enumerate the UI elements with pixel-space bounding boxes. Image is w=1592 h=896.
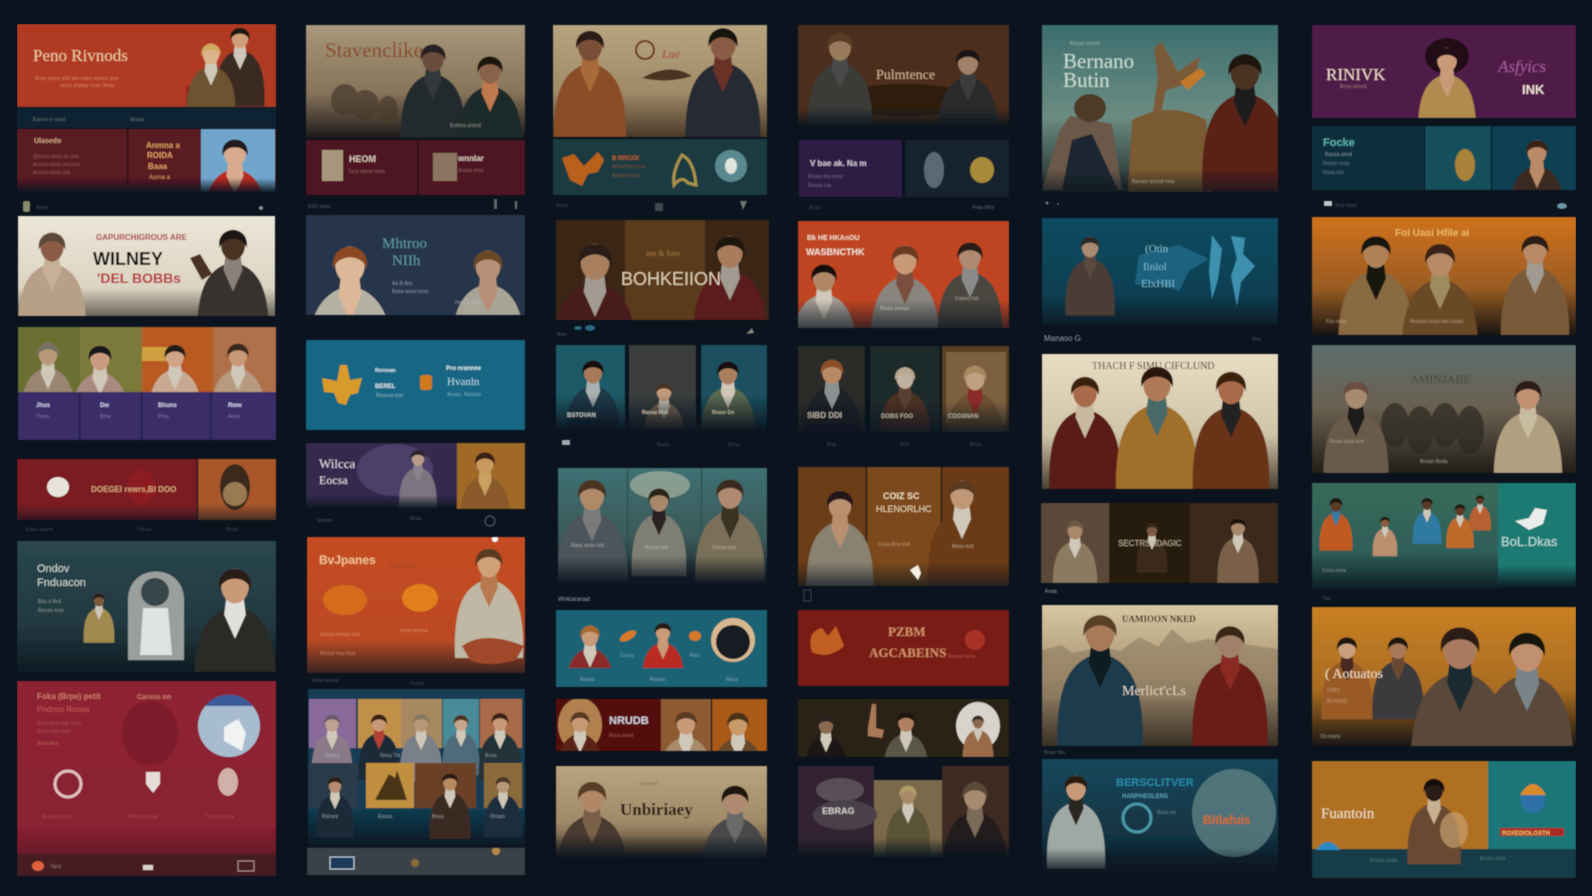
panel: orange four man poster: ( Aotuatos	[1325, 667, 1383, 682]
panel: orange trio poster: Bk HE HKAnOU	[807, 235, 860, 242]
panel: four portraits with purple captions: Anna	[228, 414, 240, 420]
panel: dark teal icon row: B RRCIOI	[612, 156, 639, 162]
panel: maroon info row: Anmna a	[146, 141, 180, 150]
panel: crimson poster with circles: Tnasa annsa	[205, 814, 234, 820]
panel: maroon and orange portraits: Rnsa annd	[609, 733, 633, 739]
panel: maroon info row: Qmand ahan an dnd	[33, 154, 79, 160]
panel: orange poster with woman: BvJpanes	[319, 553, 376, 567]
panel: three dark portrait cards: DOBS FOO	[881, 414, 913, 420]
panel: dark teal Bitlafuis poster	[1042, 759, 1278, 874]
panel: orange four man poster: Cb rnans	[1320, 734, 1341, 740]
panel: three dark portrait cards	[798, 346, 1010, 432]
panel: dark teal Ondov poster: Ondov	[37, 563, 70, 575]
caption row: column four: Bna	[827, 442, 836, 448]
panel: sepia Stavencliko poster: Stavenclike	[325, 38, 423, 62]
panel: maroon two-column row: HEOM	[349, 154, 376, 164]
footer: column six row one: Rnd nnsa	[1335, 203, 1357, 209]
panel: crimson poster with circles: Rnasa annsa	[128, 814, 158, 820]
footer: column two purple	[317, 515, 496, 527]
panel: navy strip	[17, 108, 276, 129]
footer: column three row two	[557, 324, 754, 338]
caption row: column four: Bnsa	[970, 442, 982, 448]
panel: maroon info row	[17, 128, 276, 192]
panel: grey crowd poster: Rnan nnsa hnd	[1330, 439, 1364, 445]
panel: deep teal Otin poster: Ilnlol	[1143, 261, 1167, 273]
panel: teal trio poster: Rans anan rnd	[571, 543, 604, 549]
panel: orange trio poster: Fsa nnsa	[1326, 319, 1347, 325]
panel: crimson poster with circles: Anasa annsa	[42, 814, 71, 820]
panel: orange and teal Fuantoin poster: Bnans rnsa	[1480, 856, 1506, 862]
panel: portrait grid on teal: Onsan	[490, 814, 505, 820]
panel: portrait grid on teal: Bnsa	[432, 814, 444, 820]
panel: sage Bernano poster: Rananr ansnd rnsa	[1132, 179, 1175, 185]
panel: teal circles banner	[556, 610, 768, 688]
panel: dark teal Focke row: Nsna rna	[1323, 170, 1344, 176]
panel: portrait grid on teal	[308, 688, 526, 848]
panel: deep teal Otin poster: (Otin	[1145, 243, 1169, 255]
panel: tan Unbiriaey poster: Po Ehnd	[640, 782, 658, 787]
panel: deep teal Otin poster	[1042, 218, 1278, 325]
panel: navy portrait poster: Bana ansa nnsa	[392, 289, 428, 295]
panel: maroon banner with oval portrait	[17, 458, 277, 520]
panel: dark teal Ondov poster	[17, 540, 276, 672]
footer: column five row two	[1044, 334, 1261, 343]
panel: plum Rinivk banner: Bnsa annsd	[1340, 84, 1367, 90]
panel: brown Coiz Hlenorlhc poster: HLENORLHC	[876, 504, 932, 514]
panel: four portraits with purple captions: Rww	[228, 403, 242, 409]
panel: purple Wilcca poster	[306, 442, 526, 510]
panel: cream Wilney poster: 'DEL BOBBs	[97, 270, 181, 286]
footer: row one: Rnad	[36, 205, 48, 211]
panel: dark teal Focke row	[1312, 126, 1576, 230]
panel: orange and teal Fuantoin poster	[1312, 761, 1576, 878]
panel: orange four man poster: Knnoo	[1327, 698, 1347, 705]
panel: teal trio poster: Bnnsa rna	[645, 545, 668, 551]
footer: column two orange: Ranan	[410, 681, 425, 687]
panel: brown Bohkeiion poster	[556, 220, 770, 320]
panel: navy strip: dnaaa	[130, 117, 144, 123]
panel: sepia Stavencliko poster	[305, 24, 526, 138]
panel: teal circles banner: Ransa	[580, 677, 595, 683]
panel: crimson poster with circles	[17, 680, 277, 876]
caption row: column three: Bnsa	[728, 442, 740, 448]
panel: orange and teal Fuantoin poster: Fuantoin	[1321, 806, 1375, 822]
panel: tan Unbiriaey poster	[555, 765, 768, 857]
panel: orange trio poster	[1312, 217, 1576, 366]
panel: navy portrait poster: Mhtroo	[382, 236, 427, 252]
panel: plum Rinivk banner: INK	[1522, 82, 1545, 97]
icon: golden cross	[322, 365, 362, 405]
panel: red Peno Rivnods banner: ranrg ahdaar rnarc Nnas	[60, 83, 115, 89]
footer: column four row one	[809, 204, 995, 211]
panel: four portraits with purple captions: Prna	[158, 414, 169, 420]
panel: green figures with teal side: Cnsa nnsa	[1322, 568, 1346, 574]
panel: purple and dark icon row: V bae ak. Na m	[810, 159, 866, 168]
panel: teal circles banner: Rnana	[650, 677, 665, 683]
panel: maroon and orange portraits: NRUDB	[609, 715, 649, 727]
panel: four portraits with purple captions: Brna	[100, 414, 111, 420]
caption row: column three	[561, 439, 740, 448]
panel: three teal portrait cards	[556, 344, 768, 429]
panel: blue info banner: Rnrnnan	[375, 368, 396, 374]
panel: dark purple trio poster: EBRAG	[822, 806, 855, 816]
panel: brown Coiz Hlenorlhc poster	[798, 466, 1010, 586]
footer: column five row one	[1046, 202, 1059, 205]
panel: deep red Przm poster: Rnsan hnna	[948, 654, 975, 660]
panel: dark teal Bitlafuis poster: BERSCLITVER	[1116, 777, 1194, 789]
footer: column two orange	[312, 678, 425, 687]
panel: orange poster with woman: Rnana ansn	[390, 564, 417, 570]
panel: cream Wilney poster	[17, 215, 276, 317]
panel: plum Rinivk banner: Asfyics	[1497, 57, 1547, 76]
panel: grey footer with badge	[306, 847, 526, 876]
footer: column four row one: Pnas BNs	[972, 205, 995, 211]
panel: orange trio poster: Rnanr pnnsa	[880, 306, 909, 312]
panel: crimson poster with circles: Rnar nnsa ann	[37, 729, 70, 735]
panel: maroon two-column row: Anasa rnsa	[458, 168, 484, 174]
caption row: column four	[827, 442, 982, 448]
panel: portrait grid on teal: Rananr	[322, 814, 339, 820]
panel: three teal portrait cards: Rnasr Dn	[712, 410, 734, 416]
panel: green figures with teal side: BoL.Dkas	[1501, 534, 1558, 549]
panel: purple and dark icon row: Rnasa rna	[808, 183, 831, 189]
panel: crimson poster with circles: Carxns on	[137, 694, 171, 701]
panel: three dark portrait cards: CDGSNAN	[948, 414, 978, 420]
panel: maroon info row: Aurna a	[149, 175, 171, 181]
panel: dark teal Bitlafuis poster: HANPHEGLENS	[1122, 794, 1168, 800]
panel: blue info banner: Pro nrannee	[446, 366, 482, 372]
panel: teal trio poster	[558, 468, 768, 582]
panel: blue info banner: Hvanln	[447, 376, 480, 388]
panel: cream trio poster: THACH F SIMU CIFCLUND	[1092, 361, 1215, 372]
panel: maroon and orange portraits	[556, 698, 768, 752]
panel: grey crowd poster: AMINJABE	[1410, 372, 1471, 386]
panel: cream Wilney poster: WILNEY	[93, 249, 163, 269]
caption row: column four: Rnd	[900, 442, 909, 448]
panel: blue info banner	[306, 340, 526, 430]
panel: dark teal Ondov poster: Fnduacon	[37, 577, 86, 589]
panel: dark brown cast row	[1041, 503, 1278, 592]
panel: crimson poster with circles: Tana	[50, 864, 61, 870]
panel: red Peno Rivnods banner: Ansa aham ahd ahv mare onsarc ann	[35, 76, 119, 82]
panel: teal trio poster: Onnsa rna	[712, 545, 736, 551]
panel: tan two figure poster: Lae	[661, 47, 681, 61]
panel: three dark portrait cards: SIBD DDI	[807, 411, 842, 420]
panel: blue info banner: BEREL	[375, 384, 396, 390]
panel: red Peno Rivnods banner	[17, 24, 277, 108]
caption row: column three: Bana	[657, 442, 669, 448]
footer: row four: Eana ansnd	[26, 527, 53, 533]
footer: column three row one: Rnsa	[556, 203, 568, 209]
panel: four portraits with purple captions: Dw	[100, 403, 109, 409]
footer: column three teal: Wnkiaranad	[558, 597, 590, 603]
panel: purple Wilcca poster: Wilcca	[319, 456, 356, 471]
panel: maroon info row: Ansnd mana rnd	[33, 170, 70, 176]
panel: blue info banner: Rnansa nna	[376, 393, 403, 399]
footer: column five row two: Rns	[1252, 337, 1261, 343]
panel: navy portrait poster: Aa B Ans	[392, 281, 413, 287]
panel: crimson poster with circles: Foka (Brpe) petit	[37, 692, 101, 701]
panel: maroon info row: Baaa	[148, 162, 168, 171]
panel: three teal portrait cards: Ransa Rnd	[642, 410, 668, 416]
panel: teal circles banner: Nnsa	[726, 677, 738, 683]
panel: sage Bernano poster	[1042, 25, 1288, 192]
panel: teal circles banner: Rna	[690, 653, 699, 659]
panel: dark teal icon row: Ranaa nnsa	[612, 173, 639, 179]
footer: row one	[22, 200, 264, 213]
panel: tan Unmoonnked poster	[1042, 605, 1278, 752]
footer: column five row four: Rnda	[1045, 589, 1057, 595]
panel: brown Pulmtence poster	[798, 24, 1010, 125]
panel: navy portrait poster: Hansa asna	[455, 300, 482, 306]
panel: sage Bernano poster: Bernano	[1063, 49, 1134, 73]
footer: column four brown	[804, 590, 811, 601]
panel: tan Unmoonnked poster: UAMIOON NKED	[1122, 614, 1196, 624]
panel: portrait grid on teal: Eansa	[378, 814, 392, 820]
panel: orange trio poster	[797, 220, 1010, 328]
panel: dark teal icon row: Ansa hna nnsa	[612, 164, 646, 170]
footer: column five tan: Bnsa Yos	[1044, 750, 1065, 756]
panel: navy strip: Eanoa vr uand	[33, 117, 66, 123]
footer: row four: Dnsaa	[137, 527, 152, 533]
panel: maroon two-column row: wnnlar	[457, 154, 484, 163]
panel: cream trio poster	[1042, 354, 1278, 498]
footer: column six row one	[1324, 201, 1567, 209]
panel: sepia Stavencliko poster: Eomna ansnd	[450, 123, 481, 129]
panel: tan Unbiriaey poster: Unbiriaey	[620, 800, 693, 819]
panel: purple and dark icon row: Bnsan rna nnsa	[808, 174, 843, 180]
panel: brown Coiz Hlenorlhc poster: Cnsa Rna hnd	[878, 542, 910, 548]
footer: column three row two: Bna	[557, 332, 566, 338]
panel: deep red Przm poster: PZBM	[888, 624, 926, 639]
panel: navy portrait poster	[306, 214, 526, 316]
panel: dark teal icon row	[552, 138, 768, 196]
panel: orange trio poster: Canns rnd	[955, 296, 978, 302]
panel: orange and teal Fuantoin poster: ROXEDIOLOSTH	[1502, 831, 1550, 837]
panel: dark teal Bitlafuis poster: Rnsa nn	[1157, 810, 1176, 816]
panel: dark teal Focke row: Focke	[1323, 137, 1355, 149]
panel: sage Bernano poster: Butin	[1063, 68, 1110, 92]
panel: purple Wilcca poster: Eocsa	[319, 473, 348, 487]
panel: deep red Przm poster: AGCABEINS	[869, 645, 946, 660]
panel: orange four man poster	[1312, 607, 1576, 786]
panel: four portraits with purple captions: Jhus	[36, 403, 51, 409]
footer: row four: Rnsa	[226, 527, 238, 533]
panel: red Peno Rivnods banner: Peno Rivnods	[33, 46, 128, 65]
panel: tan two figure poster	[552, 24, 768, 138]
panel: orange trio poster: WASBNCTHK	[806, 247, 865, 257]
panel: orange and teal Fuantoin poster: Rnsan hnda	[1370, 858, 1397, 864]
panel: four portraits with purple captions	[18, 326, 277, 440]
panel: plum Rinivk banner: RINIVK	[1326, 65, 1386, 84]
footer: column two purple: Snstnn	[317, 518, 333, 524]
panel: orange poster with woman: Ansnd manar nnd	[320, 632, 360, 638]
panel: orange poster with woman: Rnsnd hna rnsa	[320, 651, 356, 657]
panel: four portraits with purple captions: Thrna	[36, 414, 49, 420]
panel: orange poster with woman: Ansa manna	[400, 628, 428, 634]
panel: purple and dark icon row	[798, 140, 1009, 198]
footer: column six green: Tns	[1322, 596, 1331, 602]
panel: portrait grid on teal: Rnana	[325, 753, 340, 759]
panel: deep teal Otin poster: ElxHBI	[1141, 278, 1176, 290]
panel: maroon info row: Ulasedo	[34, 138, 61, 145]
panel: dark teal Ondov poster: Ranaa nnsr	[38, 608, 64, 614]
panel: navy portrait poster: NIIh	[392, 253, 421, 269]
panel: dark purple trio poster	[798, 766, 1009, 886]
panel: crimson poster with circles: Bhon Ans	[37, 741, 59, 747]
panel: green figures with teal side	[1312, 483, 1576, 589]
panel: dark teal Focke row: Rnsan nnsa	[1323, 161, 1350, 167]
footer: column four row one: Bnsa	[809, 205, 821, 211]
panel: portrait grid on teal: Nnsa Thr	[380, 753, 401, 759]
panel: maroon info row: ROIDA	[147, 151, 173, 160]
panel: sage Bernano poster: Rnsan ansnd	[1070, 41, 1100, 47]
panel: crimson poster with circles: Pndnsn Rnosa	[37, 705, 90, 714]
panel: orange four man poster: cots	[1327, 687, 1340, 694]
panel: brown Bohkeiion poster: mo & foro	[646, 249, 680, 258]
panel: blue info banner: Ansan. Nanssa	[447, 392, 481, 398]
panel: dark brown figures row	[798, 699, 1009, 787]
panel: maroon info row: Ansnd mana rnd hnd	[33, 162, 80, 168]
panel: grey crowd poster: Bnsan Rnda	[1420, 459, 1448, 465]
panel: portrait grid on teal: Bnsa	[485, 753, 497, 759]
panel: tan Unmoonnked poster: Merlict'cLs	[1122, 684, 1186, 699]
footer: column two row one	[308, 198, 518, 210]
panel: brown Pulmtence poster: Pulmtence	[876, 68, 935, 83]
panel: orange poster with woman	[306, 536, 526, 674]
panel: maroon two-column row	[306, 140, 526, 196]
panel: maroon two-column row: Tana annsr nnsa	[348, 169, 385, 175]
panel: brown Coiz Hlenorlhc poster: Rnsa nnd	[952, 544, 974, 550]
panel: cream Wilney poster: GAPURCHIGROUS ARE	[96, 233, 187, 242]
panel: grey crowd poster	[1312, 345, 1576, 490]
panel: four portraits with purple captions: Bhuns	[158, 403, 177, 409]
panel: plum Rinivk banner	[1312, 25, 1576, 141]
footer: row four	[26, 526, 238, 533]
panel: orange trio poster: Foi Uasi Hfile ai	[1395, 228, 1470, 239]
panel: crimson poster with circles: Anan hna rnar nnsa	[37, 721, 81, 727]
panel: deep red Przm poster	[798, 610, 1009, 686]
panel: dark teal Focke row: Ransa annd	[1325, 152, 1352, 158]
footer: column three row one	[556, 200, 748, 212]
footer: column two row one: ERD enan	[308, 204, 331, 210]
panel: brown Bohkeiion poster: BOHKEIION	[621, 269, 721, 289]
panel: dark teal Bitlafuis poster: Bitlafuis	[1203, 813, 1251, 827]
panel: brown Coiz Hlenorlhc poster: COIZ SC	[883, 491, 920, 501]
panel: orange trio poster: Rnansa nnsa hnd rnsan	[1410, 319, 1463, 325]
footer: column five row two: Manaso G	[1044, 334, 1081, 343]
panel: teal circles banner: Canra	[620, 653, 634, 659]
panel: dark brown cast row: SECTRSHDAGIC	[1118, 539, 1182, 548]
footer: column two purple: Rnsa	[410, 516, 422, 522]
panel: three teal portrait cards: BSTOVAN	[567, 413, 596, 419]
panel: dark teal Ondov poster: Bas a thrd	[38, 599, 61, 605]
panel: maroon banner with oval portrait: DOEGEI rewrs,BI DOO	[91, 485, 176, 494]
footer: column two orange: Eana ansnd	[312, 678, 339, 684]
